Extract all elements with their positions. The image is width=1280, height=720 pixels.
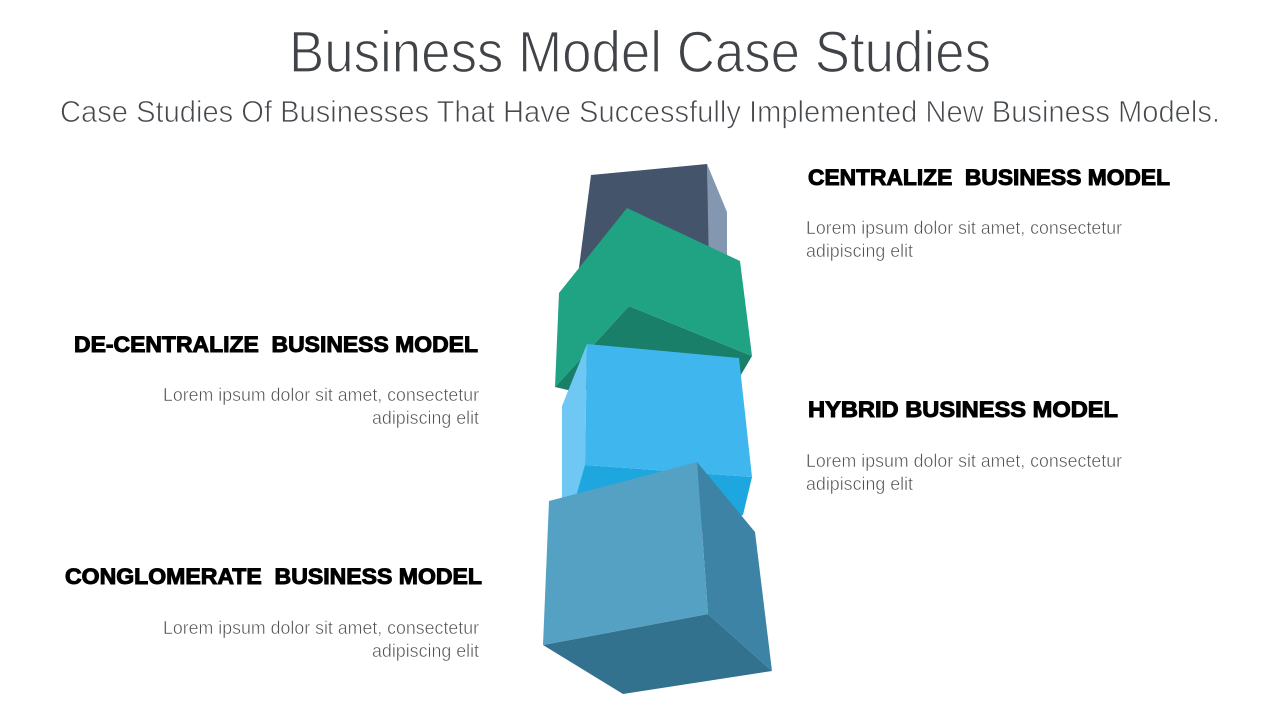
- cube 1: navy: [578, 164, 727, 275]
- cube 4: teal: [543, 462, 772, 694]
- label: conglomerate: [65, 564, 482, 661]
- cube 2: green: [555, 208, 752, 391]
- text: conglomerate description: Lorem ipsum dolor sit amet, consectetur: [163, 618, 479, 638]
- text: conglomerate description: adipiscing elit: [372, 641, 479, 661]
- heading: conglomerate: CONGLOMERATE BUSINESS MODEL: [65, 564, 482, 589]
- heading: centralize: CENTRALIZE BUSINESS MODEL: [808, 165, 1170, 190]
- text: conglomerate description: [163, 618, 479, 661]
- text: centralize description: [806, 218, 1122, 261]
- text: centralize description: Lorem ipsum dolor sit amet, consectetur: [806, 218, 1122, 238]
- text: centralize description: adipiscing elit: [806, 241, 913, 261]
- label: hybrid: [806, 397, 1122, 494]
- title: Business Model Case Studies: [289, 20, 991, 85]
- heading: hybrid: HYBRID BUSINESS MODEL: [808, 397, 1118, 422]
- stacked cubes graphic: [543, 164, 772, 694]
- text: de-centralize description: [163, 385, 479, 428]
- cube 3: blue: [562, 344, 752, 530]
- label: centralize: [806, 165, 1170, 261]
- text: de-centralize description: adipiscing elit: [372, 408, 479, 428]
- subtitle: Case Studies Of Businesses That Have Successfully Implemented New Business Models.: [60, 94, 1220, 129]
- text: de-centralize description: Lorem ipsum dolor sit amet, consectetur: [163, 385, 479, 405]
- text: hybrid description: adipiscing elit: [806, 474, 913, 494]
- text: hybrid description: [806, 451, 1122, 494]
- heading: de-centralize: DE-CENTRALIZE BUSINESS MODEL: [74, 332, 478, 357]
- text: hybrid description: Lorem ipsum dolor sit amet, consectetur: [806, 451, 1122, 471]
- label: de-centralize: [74, 332, 479, 428]
